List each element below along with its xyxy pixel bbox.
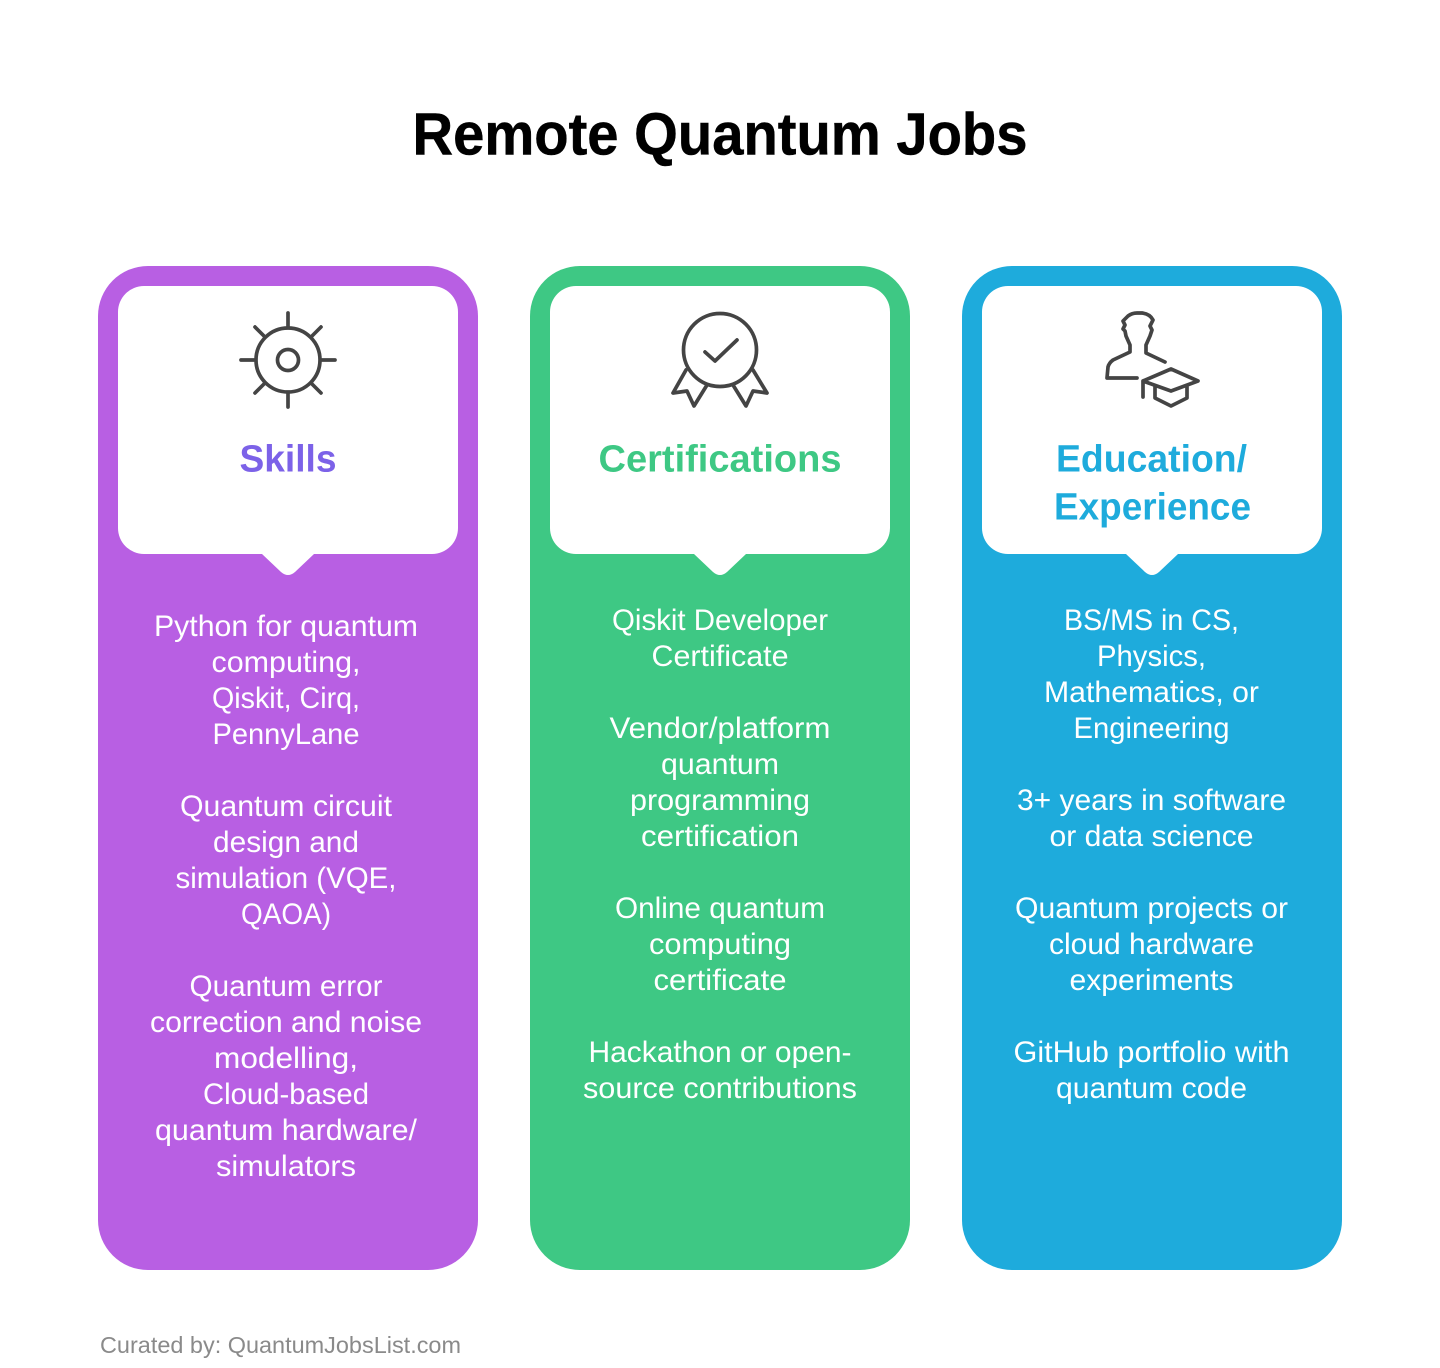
education list: cloud hardware [1049,928,1254,961]
education list: experiments [1070,964,1234,997]
skills list: Python for quantum [154,610,418,643]
skills list: Quantum circuit [180,790,393,823]
skills header card [118,286,458,575]
skills list: QAOA) [241,898,331,931]
skills list: quantum hardware/ [155,1114,418,1147]
education list: quantum code [1056,1072,1247,1105]
title: Remote Quantum Jobs [412,100,1028,168]
skills list: Qiskit, Cirq, [212,682,360,715]
heading: education / experience: Education/ [1056,438,1247,480]
education header card [982,286,1322,575]
certifications list: quantum [661,748,779,781]
heading: certifications: Certifications [598,438,842,480]
education list: BS/MS in CS, [1064,604,1239,637]
education list: Mathematics, or [1044,676,1259,709]
education list [1014,604,1290,1105]
education list: 3+ years in software [1017,784,1286,817]
certifications list: certification [641,820,799,853]
certifications list: programming [630,784,810,817]
certifications header card [550,286,890,575]
icon: person with graduation cap [1107,313,1198,406]
skills list: simulation (VQE, [176,862,396,895]
certifications list: Qiskit Developer [612,604,828,637]
skills list: simulators [216,1150,356,1183]
footer credit: Curated by: QuantumJobsList.com [100,1332,461,1358]
education list: GitHub portfolio with [1014,1036,1290,1069]
education list: Quantum projects or [1015,892,1288,925]
certifications list: Online quantum [615,892,825,925]
certifications list: computing [649,928,791,961]
heading: education / experience: Experience [1054,486,1251,528]
skills list: design and [213,826,359,859]
skills list: Quantum error [190,970,383,1003]
education list: Physics, [1097,640,1206,673]
skills list [150,610,422,1183]
skills list: correction and noise [150,1006,422,1039]
icon: award rosette [673,314,767,406]
certifications list [583,604,857,1105]
certifications list: Vendor/platform [610,712,830,745]
icon: quantum gear [241,313,335,407]
skills list: Cloud-based [203,1078,369,1111]
heading: education / experience [1054,438,1251,528]
certifications list: Hackathon or open- [588,1036,852,1069]
heading: skills: Skills [240,438,336,480]
skills list: modelling, [214,1042,358,1075]
skills list: PennyLane [212,718,360,751]
skills list: computing, [212,646,360,679]
education list: or data science [1050,820,1254,853]
education list: Engineering [1074,712,1230,745]
panel: certifications [530,266,910,1270]
certifications list: source contributions [583,1072,857,1105]
certifications list: certificate [654,964,786,997]
panel: skills [98,266,478,1270]
panel: education and experience [962,266,1342,1270]
certifications list: Certificate [652,640,788,673]
